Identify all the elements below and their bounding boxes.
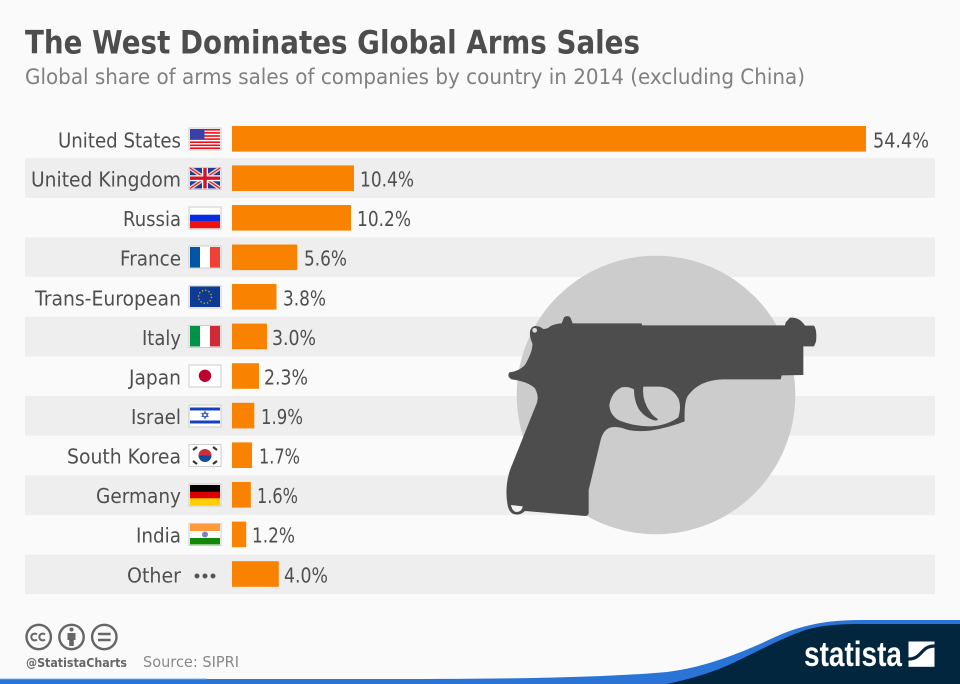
bar: Trans-European	[232, 284, 276, 310]
flag: United States	[189, 128, 221, 150]
row: Other	[127, 561, 328, 587]
bar: South Korea	[232, 442, 252, 468]
row: United States	[58, 126, 929, 152]
row: France: 5.6%	[304, 247, 347, 271]
row: India: 1.2%	[252, 524, 295, 548]
flag: France	[189, 246, 221, 268]
bar: Israel	[232, 403, 254, 428]
icon: creative commons licence	[26, 625, 117, 649]
footer band	[0, 620, 960, 684]
handle: @StatistaCharts	[26, 656, 127, 670]
row: India: India	[136, 524, 181, 548]
row: United States: 54.4%	[873, 128, 929, 152]
source: Source: SIPRI	[143, 653, 239, 671]
flag: Russia	[189, 207, 221, 229]
row: Germany: Germany	[96, 484, 181, 508]
row: Germany	[96, 482, 298, 508]
icon: statista mark	[908, 642, 935, 667]
row: South Korea: 1.7%	[259, 445, 300, 469]
row: Trans-European	[34, 284, 326, 310]
row: Italy: Italy	[142, 326, 181, 350]
row: Japan: 2.3%	[264, 366, 308, 390]
row: Israel	[131, 403, 303, 429]
row: Germany: 1.6%	[257, 484, 298, 508]
row: France: France	[120, 247, 181, 271]
flag: India	[189, 524, 221, 546]
row: United Kingdom: 10.4%	[360, 168, 414, 192]
bar: Italy	[232, 324, 267, 349]
row: United Kingdom	[31, 165, 414, 192]
bar: United States	[232, 126, 866, 152]
row: Japan	[127, 363, 308, 390]
bar: Germany	[232, 482, 251, 508]
row: South Korea: South Korea	[67, 445, 181, 469]
row: Other: Other	[127, 563, 182, 587]
row: Russia: Russia	[123, 207, 181, 231]
row: Trans-European: 3.8%	[283, 286, 326, 310]
row: Italy: 3.0%	[272, 326, 316, 350]
bar: Russia	[232, 205, 351, 231]
icon: dots	[194, 574, 216, 578]
title: The West Dominates Global Arms Sales	[25, 24, 640, 62]
bar: Japan	[232, 363, 259, 389]
bar: United Kingdom	[232, 165, 354, 191]
subtitle: Global share of arms sales of companies by country in 2014 (excluding China)	[25, 65, 805, 89]
row: South Korea	[67, 442, 300, 469]
row: Russia	[123, 205, 411, 231]
row: Russia: 10.2%	[357, 207, 411, 231]
row: Trans-European: Trans-European	[34, 286, 181, 310]
flag: United Kingdom	[189, 168, 221, 190]
row: France	[120, 244, 347, 271]
row: Israel: 1.9%	[261, 405, 303, 429]
row: Israel: Israel	[131, 405, 181, 429]
row: Italy	[142, 324, 316, 350]
flag: EU	[189, 286, 221, 308]
statista logo: statista	[804, 635, 902, 674]
row: India	[136, 522, 295, 548]
bar: Other	[232, 561, 279, 587]
flag: Germany	[189, 484, 221, 506]
row: Japan: Japan	[127, 366, 181, 390]
flag: Japan	[189, 365, 221, 387]
flag: Israel	[189, 405, 221, 427]
icon: pistol	[506, 316, 816, 516]
bar: India	[232, 522, 246, 547]
background circle	[517, 256, 795, 534]
row: United States: United States	[58, 128, 181, 152]
flag: South Korea	[189, 444, 221, 466]
row stripes	[25, 158, 935, 594]
row: United Kingdom: United Kingdom	[31, 168, 181, 192]
bar: France	[232, 244, 297, 270]
flag: Italy	[189, 326, 221, 348]
row: Other: 4.0%	[284, 563, 328, 587]
